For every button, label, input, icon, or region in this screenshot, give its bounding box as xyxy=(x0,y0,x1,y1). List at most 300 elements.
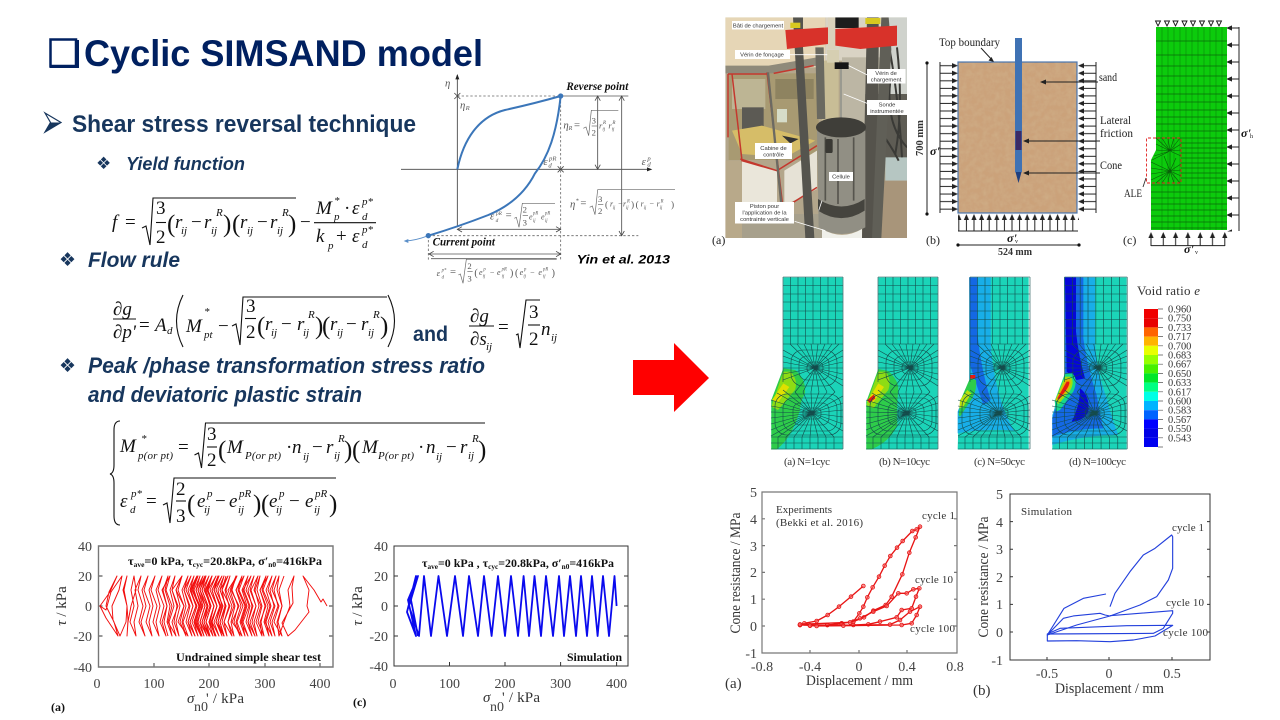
diagram: finite element mesh: (c) xyxy=(1123,233,1136,247)
boundary stress arrows xyxy=(940,62,958,213)
diagram: finite element mesh: σ' xyxy=(1241,126,1251,140)
chart: undrained simple shear test xyxy=(51,540,333,715)
tick labels: 0.5 xyxy=(1163,667,1181,682)
equation: flow rule: ) xyxy=(315,313,323,340)
tick labels: 400 xyxy=(310,677,330,692)
equation: peak stress ratio and deviatoric plastic strain: − xyxy=(289,491,300,512)
chart: experimental cone resistance: (Bekki et al. 2016) xyxy=(776,517,863,529)
callout labels xyxy=(732,21,907,224)
citation: Yin et al. 2013 xyxy=(577,252,670,266)
leader arrows xyxy=(981,48,1100,173)
legend values: 0.700 xyxy=(1168,341,1191,352)
gray formulas: − xyxy=(530,268,535,277)
equation: peak stress ratio and deviatoric plastic strain: ij xyxy=(276,504,282,516)
equation: peak stress ratio and deviatoric plastic strain: n xyxy=(292,437,302,458)
cabin lower panels xyxy=(742,162,777,202)
gray formulas: ( xyxy=(636,199,639,210)
equation: peak stress ratio and deviatoric plastic strain: R xyxy=(471,433,479,445)
gray formulas: R xyxy=(465,105,470,112)
tick labels: 3 xyxy=(996,543,1003,558)
diagram: finite element mesh: v xyxy=(1195,250,1198,256)
equation: peak stress ratio and deviatoric plastic strain: − xyxy=(215,491,226,512)
equation: flow rule: = xyxy=(498,317,509,338)
chart: reverse point stress strain diagram xyxy=(401,74,675,284)
equation: yield function: d xyxy=(362,211,368,223)
tick labels: 20 xyxy=(374,570,388,585)
gray formulas: ε xyxy=(543,157,548,168)
tick labels: 0 xyxy=(1106,667,1112,682)
gray formulas: p xyxy=(523,268,527,273)
equation: yield function: k xyxy=(316,226,325,247)
chart: experimental cone resistance: cycle 10 xyxy=(915,574,954,586)
legend values: 0.717 xyxy=(1168,332,1191,343)
gray formulas: = xyxy=(574,120,580,131)
equation: flow rule: R xyxy=(307,309,315,321)
gray formulas: η xyxy=(563,120,569,131)
equation: flow rule: ∂p' xyxy=(113,322,137,343)
gray formulas: ) xyxy=(552,268,555,279)
tick labels: -0.8 xyxy=(751,660,773,675)
equation: peak stress ratio and deviatoric plastic strain: ij xyxy=(303,451,309,463)
tick labels: -20 xyxy=(369,630,388,645)
gray formulas: 3 xyxy=(467,274,472,284)
green mesh xyxy=(1151,27,1227,230)
ALE dashed box xyxy=(1146,138,1181,183)
tick labels: 0 xyxy=(94,677,100,692)
gray formulas: pR xyxy=(544,212,550,217)
parameters label: ave xyxy=(428,563,438,571)
gray formulas: ij xyxy=(660,206,663,211)
equation: peak stress ratio and deviatoric plastic strain: ) xyxy=(253,491,261,518)
parameters label: ave xyxy=(134,561,144,569)
gray formulas: − xyxy=(489,268,495,277)
equation: peak stress ratio and deviatoric plastic strain: r xyxy=(326,437,334,458)
gray formulas: ij xyxy=(545,219,548,224)
equation: peak stress ratio and deviatoric plastic strain: − xyxy=(446,437,457,458)
diagram: cone penetration model: friction xyxy=(1100,126,1133,140)
equation: peak stress ratio and deviatoric plastic strain: e xyxy=(197,491,205,512)
caption: N=10 cycles: (b) N=10cyc xyxy=(879,456,930,468)
equation: flow rule: 2 xyxy=(529,329,538,350)
equation: yield function: M xyxy=(315,198,333,219)
legend values xyxy=(1168,304,1191,444)
chart: simple shear simulation: ' / kPa xyxy=(502,690,540,706)
chart: simple shear simulation: n0 xyxy=(490,700,504,715)
equation: peak stress ratio and deviatoric plastic strain: = xyxy=(146,491,157,512)
tick labels: 0 xyxy=(381,600,388,615)
equation: yield function: ij xyxy=(211,225,217,237)
chart: simple shear simulation xyxy=(350,540,628,715)
equation: peak stress ratio and deviatoric plastic strain: · xyxy=(286,437,292,458)
gray formulas: e xyxy=(541,212,545,221)
parameters label: =0 kPa , τ xyxy=(438,558,489,570)
chart: simulated cone resistance: (b) xyxy=(973,683,990,699)
tick labels: 100 xyxy=(439,677,460,692)
dimensions xyxy=(927,63,1079,245)
equation: peak stress ratio and deviatoric plastic strain: · xyxy=(418,437,424,458)
test label: Undrained simple shear test xyxy=(176,652,321,664)
equation: yield function: ε xyxy=(352,198,360,219)
legend values: 0.667 xyxy=(1168,360,1191,371)
legend values: 0.583 xyxy=(1168,406,1191,417)
equation: flow rule: ij xyxy=(551,332,557,344)
parameters label: n0 xyxy=(562,563,570,571)
blue stress path xyxy=(407,576,617,636)
callout labels: Cellule xyxy=(832,174,850,180)
radial refinement xyxy=(1151,138,1181,183)
equation: yield function: ij xyxy=(277,225,283,237)
cone rod xyxy=(1015,38,1022,172)
tick labels xyxy=(745,486,964,675)
parameters label: =416kPa xyxy=(276,556,322,568)
gray formulas: pR xyxy=(495,211,503,217)
gray formulas: pR xyxy=(501,268,507,273)
simulation label: Simulation xyxy=(567,652,623,664)
equation: flow rule: pt xyxy=(203,329,214,341)
equation: peak stress ratio and deviatoric plastic strain: R xyxy=(337,433,345,445)
equation: yield function: p* xyxy=(361,196,374,208)
gray formulas: η xyxy=(570,199,575,210)
gray formulas: − xyxy=(649,200,654,209)
tick labels: -40 xyxy=(73,661,92,676)
equation: peak stress ratio and deviatoric plastic strain: ij xyxy=(468,450,474,462)
equation: yield function: * xyxy=(334,195,340,207)
equation: yield function: p xyxy=(333,211,340,223)
gray formulas: ) xyxy=(510,268,513,279)
equation: flow rule: ( xyxy=(322,313,330,340)
chart: experimental cone resistance: Displacement / mm xyxy=(806,673,913,689)
equation: yield function: 3 xyxy=(156,198,166,219)
equation: flow rule: * xyxy=(204,306,210,318)
callout labels: chargement xyxy=(871,78,902,84)
gray formulas: d xyxy=(548,162,552,169)
panel tag: (c) xyxy=(353,695,366,709)
gray formulas: ij xyxy=(613,206,616,211)
equation: yield function: r xyxy=(175,212,183,233)
chart: simulated cone resistance: cycle 1 xyxy=(1172,522,1204,534)
cabin interior xyxy=(732,79,765,109)
diagram: cone penetration model: 700 mm xyxy=(915,120,926,156)
axis labels: Cone resistance / MPa xyxy=(728,512,744,634)
equation: flow rule: ij xyxy=(271,327,277,339)
title: Cyclic SIMSAND model xyxy=(84,33,483,74)
callout labels: instrumentée xyxy=(870,109,904,115)
equation: yield function: ij xyxy=(181,225,187,237)
tick labels: 300 xyxy=(550,677,571,692)
equation: peak stress ratio and deviatoric plastic strain: pR xyxy=(238,488,252,500)
callout labels: Sonde xyxy=(879,102,895,108)
equation: peak stress ratio and deviatoric plastic strain: 2 xyxy=(207,450,216,471)
tick labels: 200 xyxy=(198,677,220,692)
equation: peak stress ratio and deviatoric plastic strain: n xyxy=(426,437,436,458)
ALE leader xyxy=(1143,178,1146,187)
parameters label: =20.8kPa, σ′ xyxy=(498,558,562,570)
gray formulas: η xyxy=(445,79,450,90)
legend values: 0.683 xyxy=(1168,350,1191,362)
equation: flow rule: ( xyxy=(257,313,265,340)
labels: Top boundary xyxy=(939,35,1000,49)
equation: flow rule: ij xyxy=(337,327,343,339)
gray formulas: e xyxy=(538,268,542,277)
blue simulated loops xyxy=(1047,535,1173,642)
callout labels: l'application de la xyxy=(742,210,787,216)
equation: flow rule: ij xyxy=(303,327,309,339)
equation: yield function: p xyxy=(327,240,334,252)
equation: peak stress ratio and deviatoric plastic strain: ( xyxy=(352,437,360,464)
gray formulas: 2 xyxy=(592,127,596,137)
gray formulas: ij xyxy=(502,274,505,279)
leader lines xyxy=(789,55,869,231)
equation: yield function: r xyxy=(270,212,278,233)
equation: yield function: R xyxy=(215,207,223,219)
diagram: cone penetration model: 524 mm xyxy=(998,247,1032,258)
tick labels: 3 xyxy=(750,540,757,555)
tick labels xyxy=(369,540,627,692)
subheading: yield function: ❖ xyxy=(96,154,111,174)
equation: flow rule: ) xyxy=(380,313,388,340)
gray formulas: r xyxy=(610,200,614,209)
tick labels xyxy=(991,488,1181,682)
equation: flow rule: 2 xyxy=(246,322,256,343)
gray formulas: r xyxy=(608,120,612,130)
tick labels: 0 xyxy=(996,626,1003,641)
equation: flow rule: ∂s xyxy=(470,329,487,350)
caption: N=50 cycles: (c) N=50cyc xyxy=(974,456,1025,468)
parameters label: n0 xyxy=(268,561,277,569)
gray formulas: R xyxy=(660,200,664,205)
equation: peak stress ratio and deviatoric plastic strain: e xyxy=(305,491,313,512)
subheading: flow rule: ❖ xyxy=(59,249,76,271)
equation: peak stress ratio and deviatoric plastic strain: p(or pt) xyxy=(137,450,173,462)
equation: peak stress ratio and deviatoric plastic strain: p* xyxy=(130,488,142,500)
equation: yield function: R xyxy=(281,207,289,219)
diagram: cone penetration model: Lateral xyxy=(1100,113,1132,127)
gray formulas: ( xyxy=(474,268,478,279)
chart: experimental cone resistance: cycle 1 xyxy=(922,510,955,522)
equation: yield function: ) xyxy=(288,211,296,238)
panel tag: (a) xyxy=(51,700,65,714)
gray formulas: 3 xyxy=(523,217,527,227)
gray formulas: r xyxy=(623,200,627,209)
equation: flow rule: A xyxy=(153,315,167,336)
top clamps xyxy=(790,23,800,28)
tick labels: 300 xyxy=(254,677,276,692)
equation: flow rule: r xyxy=(265,314,273,335)
plot frame xyxy=(1010,494,1210,660)
legend values: 0.733 xyxy=(1168,323,1191,334)
equation: peak stress ratio and deviatoric plastic strain xyxy=(110,421,486,527)
panel tag: photo a: (a) xyxy=(712,233,725,247)
tick labels: -1 xyxy=(745,647,757,662)
axes xyxy=(401,75,650,227)
tick labels: -1 xyxy=(991,654,1003,669)
gray formulas: ( xyxy=(515,268,518,279)
arrow: big red xyxy=(633,343,709,412)
equation: peak stress ratio and deviatoric plastic strain: pR xyxy=(314,488,328,500)
legend values: 0.750 xyxy=(1168,314,1191,325)
equation: peak stress ratio and deviatoric plastic strain: M xyxy=(119,436,137,457)
equation: flow rule: 3 xyxy=(246,296,256,317)
callout labels: Vérin de xyxy=(875,71,897,77)
gray formulas: ε xyxy=(437,268,441,278)
gray formulas xyxy=(437,79,675,284)
legend values: 0.567 xyxy=(1168,415,1191,426)
legend values: 0.633 xyxy=(1168,378,1191,389)
equation: peak stress ratio and deviatoric plastic strain: ) xyxy=(329,491,337,518)
chart: undrained simple shear test: σ xyxy=(187,691,195,707)
gray formulas: e xyxy=(497,268,501,277)
red stress path xyxy=(100,576,327,636)
gray formulas: ij xyxy=(602,128,606,133)
equation: peak stress ratio and deviatoric plastic strain: e xyxy=(269,491,277,512)
parameters label: =416kPa xyxy=(569,558,614,570)
red experimental loops xyxy=(800,527,920,626)
diagram: cone penetration model: sand xyxy=(1099,70,1117,84)
equation: yield function: 2 xyxy=(156,227,166,248)
chart: simulated cone resistance: cycle 100 xyxy=(1163,627,1208,639)
subheading: peak and phase transformation stress ratio xyxy=(59,353,485,407)
equation: yield function: ( xyxy=(167,211,175,238)
equation: peak stress ratio and deviatoric plastic strain: ( xyxy=(187,491,195,518)
chart: experimental cone resistance: (a) xyxy=(725,676,742,692)
equation: flow rule: r xyxy=(297,314,305,335)
diagram: cone penetration model: v xyxy=(1015,239,1018,245)
legend values: 0.617 xyxy=(1168,387,1191,398)
equation: yield function: = xyxy=(125,212,136,233)
gray formulas: p xyxy=(646,156,651,163)
annotations: Simulation xyxy=(1021,506,1072,518)
jack and rod xyxy=(827,50,839,63)
gray formulas: R xyxy=(602,121,606,126)
equation: yield function: r xyxy=(204,212,212,233)
gray formulas: ij xyxy=(543,274,546,279)
callout labels: Cabine de xyxy=(760,146,787,152)
tick labels: 0.8 xyxy=(946,660,964,675)
gray formulas: d xyxy=(496,218,499,224)
equation: flow rule: − xyxy=(281,314,292,335)
equation: yield function: · xyxy=(344,198,350,219)
equation: peak stress ratio and deviatoric plastic strain: * xyxy=(141,433,147,445)
equation: yield function xyxy=(112,195,376,252)
chart: simulated cone resistance: cycle 10 xyxy=(1166,597,1204,609)
equation: peak stress ratio and deviatoric plastic strain: ) xyxy=(344,437,352,464)
equation: flow rule: r xyxy=(361,314,369,335)
tick labels: 5 xyxy=(996,488,1003,503)
equation: yield function: ε xyxy=(352,226,360,247)
legend values: 0.600 xyxy=(1168,396,1191,408)
parameters label: cyc xyxy=(488,563,498,571)
subheading: peak and phase transformation stress ratio: Peak /phase transformation stress ratio xyxy=(88,353,485,378)
equation: flow rule: 3 xyxy=(529,302,538,323)
diagram: cone penetration model: (b) xyxy=(926,233,940,247)
gray formulas: − xyxy=(618,200,623,209)
gray formulas: 3 xyxy=(592,115,596,125)
equation: flow rule: r xyxy=(330,314,338,335)
plot frame xyxy=(762,492,957,653)
chart: simulated cone resistance: Displacement / mm xyxy=(1055,681,1164,697)
gray formulas: e xyxy=(520,268,524,277)
gray formulas: d xyxy=(647,162,651,169)
tick labels: 0 xyxy=(390,677,396,692)
chart: undrained simple shear test: n0 xyxy=(194,700,208,715)
legend values: 0.650 xyxy=(1168,369,1191,380)
callout labels: Bâti de chargement xyxy=(733,24,784,30)
equation: flow rule: ij xyxy=(368,327,374,339)
photo: test apparatus xyxy=(725,17,907,238)
tick labels: 20 xyxy=(78,570,92,585)
equation: peak stress ratio and deviatoric plastic strain: ij xyxy=(238,504,244,516)
photo scene xyxy=(725,17,907,238)
equation: yield function: p* xyxy=(361,224,374,236)
equation: peak stress ratio and deviatoric plastic strain: 3 xyxy=(176,506,186,527)
equation: peak stress ratio and deviatoric plastic strain: r xyxy=(460,437,468,458)
gray formulas: pR xyxy=(548,156,556,163)
gray formulas: 2 xyxy=(467,261,472,271)
equation: flow rule: R xyxy=(372,309,380,321)
gray formulas: = xyxy=(506,211,512,222)
equation: yield function: − xyxy=(257,212,268,233)
tick labels: 4 xyxy=(750,513,757,528)
equation: peak stress ratio and deviatoric plastic strain: d xyxy=(130,504,136,516)
tick labels: 2 xyxy=(996,571,1003,586)
callout labels: Piston pour xyxy=(750,204,779,210)
gray formulas: R xyxy=(568,126,573,132)
gray formulas: ij xyxy=(612,128,615,133)
gray formulas: ε xyxy=(490,211,495,222)
plot frame xyxy=(98,546,333,667)
tick labels: 1 xyxy=(996,598,1003,613)
tick labels: 2 xyxy=(750,566,757,581)
parameters label: =0 kPa, τ xyxy=(144,556,194,568)
equation: flow rule: ∂g xyxy=(470,306,489,327)
equation: peak stress ratio and deviatoric plastic strain: = xyxy=(178,437,189,458)
equation: peak stress ratio and deviatoric plastic strain: 3 xyxy=(207,424,216,445)
gray formulas: ε xyxy=(642,157,647,168)
gray formulas: η xyxy=(460,100,465,111)
gray formulas: = xyxy=(580,199,586,210)
tick labels: 0 xyxy=(856,660,862,675)
callout labels: contrainte verticale xyxy=(740,217,789,223)
gray formulas: e xyxy=(479,268,483,277)
diagram: finite element mesh: h xyxy=(1250,134,1253,140)
equation: peak stress ratio and deviatoric plastic strain: ) xyxy=(478,437,486,464)
gray formulas: 2 xyxy=(523,205,527,215)
gray formulas: ( xyxy=(605,199,608,210)
current point label: Current point xyxy=(433,237,496,249)
subheading: peak and phase transformation stress ratio: and deviatoric plastic strain xyxy=(88,382,362,407)
gray formulas: pR xyxy=(532,212,538,217)
equation: yield function: r xyxy=(240,212,248,233)
equation: peak stress ratio and deviatoric plastic strain: p xyxy=(206,488,213,500)
gray formulas: r xyxy=(641,200,645,209)
tick labels: 0.4 xyxy=(898,660,916,675)
equation: flow rule: = xyxy=(139,315,150,336)
contour panel: N=1 cycle xyxy=(771,277,843,449)
diagram: cone penetration model: σ' xyxy=(1007,231,1017,245)
gray formulas: pR xyxy=(542,268,548,273)
gray formulas: ij xyxy=(626,206,629,211)
cell xyxy=(817,131,865,234)
chart: experimental cone resistance xyxy=(725,486,964,692)
plot frame xyxy=(394,546,628,666)
equation: flow rule: and xyxy=(413,323,448,346)
equation: flow rule: d xyxy=(167,325,173,337)
equation: peak stress ratio and deviatoric plastic strain: M xyxy=(361,437,379,458)
sand body xyxy=(958,62,1077,213)
gray formulas: p xyxy=(482,268,486,273)
tick labels: 0 xyxy=(85,600,92,615)
color bands xyxy=(1144,309,1158,447)
